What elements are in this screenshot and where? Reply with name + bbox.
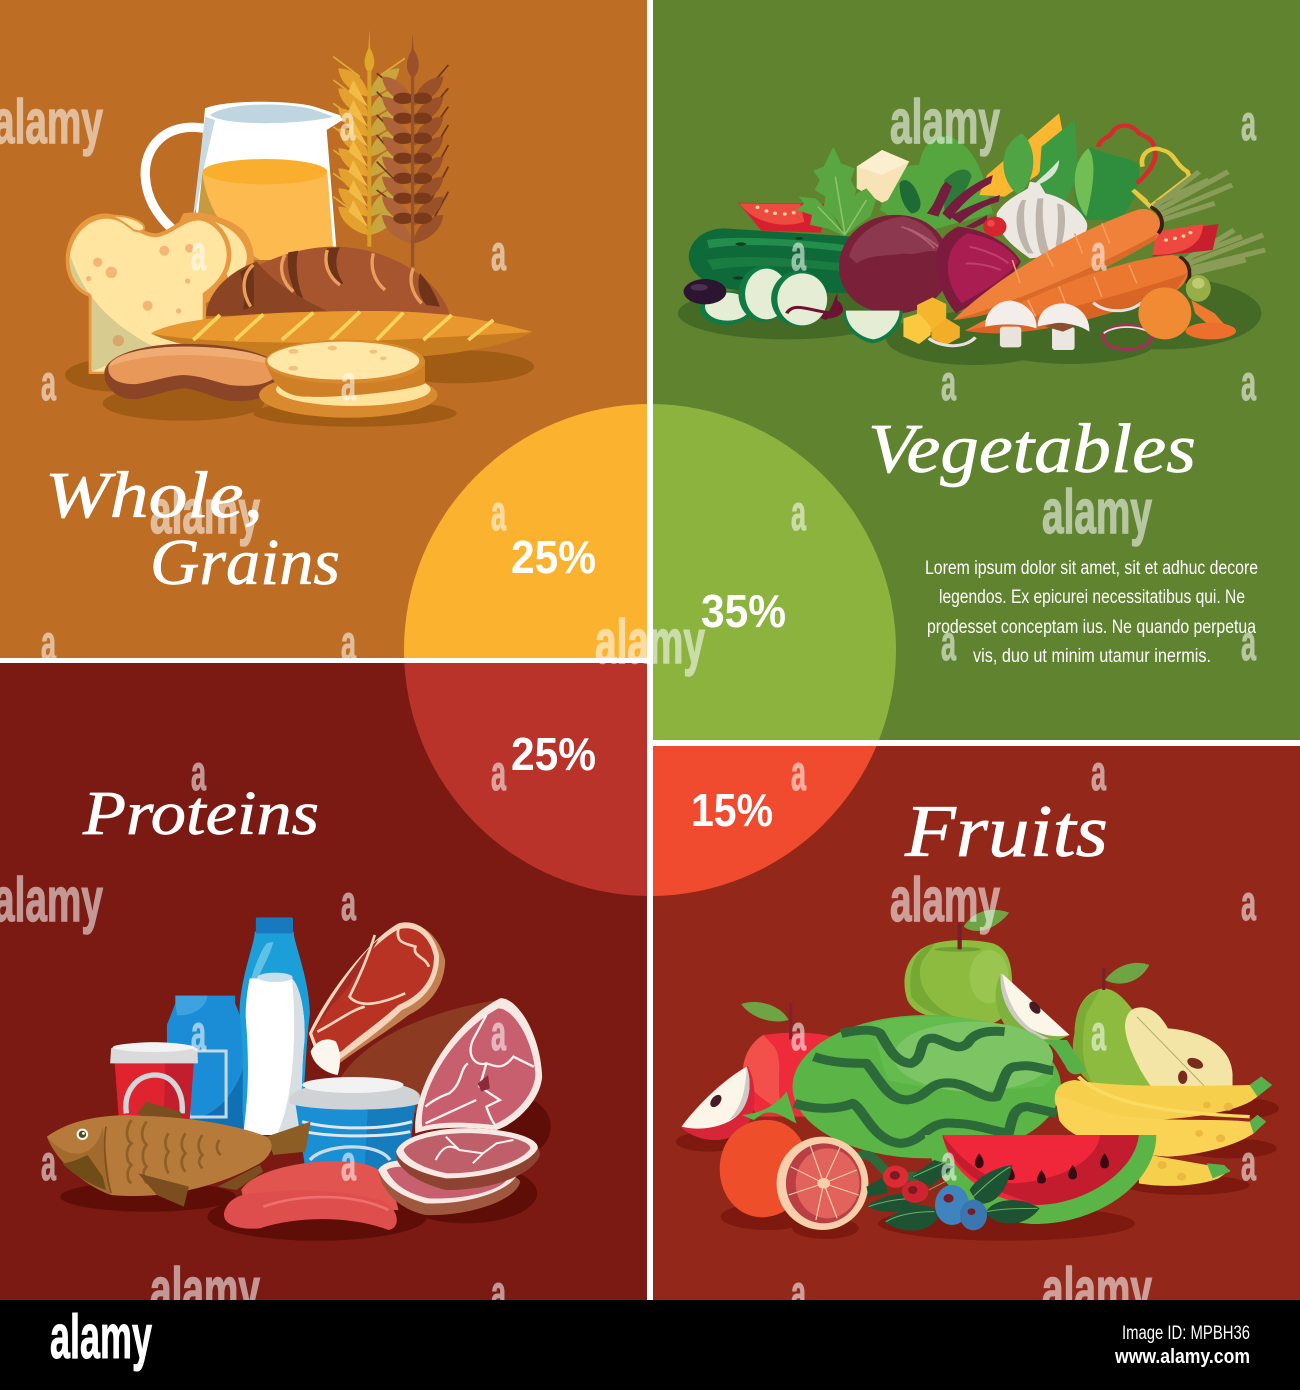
icon: brown wheat	[377, 33, 448, 267]
icon: orange and carrot slices	[1138, 275, 1236, 339]
watermarks: alamy overlay: alamy	[1042, 478, 1152, 547]
icon: brown loaf	[206, 247, 449, 316]
panel: vegetables background	[653, 0, 1300, 740]
pie segment: proteins 25%	[404, 663, 647, 896]
pie segment: whole grains 25%	[404, 404, 647, 658]
icon: green apple	[904, 910, 1012, 1024]
icon: cheese cubes	[903, 297, 960, 345]
icon: ham back	[341, 998, 517, 1113]
watermarks: alamy overlay: a	[791, 745, 807, 801]
icon: yogurt tub	[290, 1077, 420, 1170]
text block: lorem ipsum description: vis, duo ut minim utamur inermis.	[973, 646, 1211, 667]
icon: orange	[720, 1120, 808, 1217]
watermarks: alamy overlay: a	[341, 615, 357, 671]
watermarks: alamy overlay: a	[41, 615, 57, 671]
icon: watermelon slice	[925, 1135, 1156, 1224]
icon: cured ham slices	[378, 998, 542, 1215]
watermarks: alamy overlay: a	[1091, 745, 1107, 801]
icon: grapefruit half	[777, 1137, 868, 1230]
icon: beet	[787, 175, 1021, 320]
icon: sausages	[224, 1161, 398, 1230]
icon: tomato slice right	[1152, 224, 1219, 257]
icon: stacked bread slices	[259, 340, 438, 418]
icon: tomato slice left	[738, 203, 828, 233]
icon: cucumber	[689, 228, 853, 293]
icon: steak	[309, 922, 445, 1075]
icon: baguette	[151, 311, 532, 359]
watermarks: alamy overlay: a	[491, 1265, 507, 1321]
watermarks: alamy overlay: a	[1091, 1005, 1107, 1061]
panel: fruits background	[653, 746, 1300, 1300]
icon: green pear	[1073, 963, 1154, 1088]
footer: image id: Image ID: MPBH36	[1122, 1323, 1250, 1344]
icon: red cup	[110, 1042, 198, 1130]
watermarks: alamy overlay: a	[491, 745, 507, 801]
watermarks: alamy overlay: a	[491, 485, 507, 541]
icon: milk carton	[167, 996, 244, 1135]
watermarks: alamy overlay: a	[1241, 615, 1257, 671]
watermarks: alamy overlay: a	[341, 355, 357, 411]
watermarks: alamy overlay: a	[1241, 875, 1257, 931]
label: 35% vegetables: 35%	[701, 585, 786, 637]
footer: website: www.alamy.com	[1114, 1346, 1250, 1368]
icon: milk bottle	[240, 917, 310, 1135]
icon: fish	[47, 1102, 311, 1207]
panel: whole grains background	[0, 0, 647, 658]
illustration: bread, juice and wheat	[65, 29, 534, 427]
label: 25% whole grains: 25%	[511, 531, 596, 583]
watermarks: alamy overlay: a	[41, 1135, 57, 1191]
footer logo: alamy: alamy	[50, 1303, 152, 1372]
watermarks: alamy overlay: a	[191, 225, 207, 281]
watermarks: alamy overlay: a	[41, 355, 57, 411]
watermarks: alamy overlay: a	[491, 225, 507, 281]
watermarks: alamy overlay: a	[791, 1005, 807, 1061]
icon: cucumber slices	[684, 266, 903, 343]
title: Whole, Grains: Whole,	[45, 459, 263, 532]
icon: toast slice	[104, 344, 282, 401]
watermarks: alamy overlay: alamy	[150, 1256, 260, 1325]
icon: golden wheat	[333, 29, 405, 247]
icon: berries and leaves	[866, 1160, 1040, 1231]
watermarks: alamy overlay: a	[491, 1005, 507, 1061]
watermarks: alamy overlay: a	[1241, 95, 1257, 151]
icon: apple slice green	[996, 974, 1070, 1048]
label: 25% proteins: 25%	[511, 728, 596, 780]
watermarks: alamy overlay: alamy	[890, 866, 1000, 935]
icon: carrot stems	[1154, 172, 1265, 273]
watermarks: alamy overlay: a	[791, 1265, 807, 1321]
watermarks: alamy overlay: a	[340, 95, 356, 151]
icon: mushrooms	[985, 301, 1089, 350]
label: 15% fruits: 15%	[691, 784, 773, 836]
title: Proteins: Proteins	[82, 780, 319, 848]
watermarks: alamy overlay: alamy	[595, 608, 705, 677]
illustration: proteins	[47, 917, 551, 1241]
icon: carrots	[953, 207, 1190, 333]
icon: half pear	[1125, 1007, 1233, 1088]
footer bar	[0, 1300, 1300, 1390]
watermarks: alamy overlay: a	[1241, 355, 1257, 411]
watermarks: alamy overlay: a	[341, 875, 357, 931]
icon: cheese block	[857, 150, 909, 203]
watermarks: alamy overlay: a	[191, 1005, 207, 1061]
illustration: vegetables	[678, 113, 1265, 365]
icon: greens	[880, 113, 1139, 233]
title: Whole, Grains	[45, 459, 340, 599]
watermarks: alamy overlay: a	[1241, 1135, 1257, 1191]
watermarks: alamy overlay: a	[941, 355, 957, 411]
watermarks: alamy overlay: a	[941, 615, 957, 671]
icon: juice jug	[145, 102, 347, 260]
watermarks: alamy overlay: a	[341, 1135, 357, 1191]
icon: sliced bread loaf	[66, 212, 254, 374]
title: Whole, Grains: Grains	[150, 526, 340, 599]
watermarks: alamy overlay: a	[791, 225, 807, 281]
icon: leafy herb	[796, 147, 876, 237]
icon: garlic	[997, 160, 1087, 258]
illustration: fruits	[676, 910, 1279, 1241]
watermarks: alamy overlay: a	[191, 745, 207, 801]
text block: lorem ipsum description	[925, 558, 1258, 667]
icon: onion rings	[929, 303, 1151, 349]
panel: proteins background	[0, 663, 647, 1300]
icon: red apple	[741, 1002, 831, 1117]
icon: watermelon	[793, 1015, 1061, 1177]
watermarks: alamy overlay: a	[1091, 225, 1107, 281]
icon: bananas	[1043, 1040, 1272, 1186]
watermarks: alamy overlay: alamy	[1042, 1256, 1152, 1325]
icon: pepper rings	[1098, 126, 1189, 207]
title: Vegetables: Vegetables	[868, 411, 1196, 488]
pie segment: fruits 15%	[653, 746, 876, 896]
pie segment: vegetables 35%	[653, 404, 896, 740]
watermarks: alamy overlay: alamy	[150, 478, 260, 547]
title: Fruits: Fruits	[904, 791, 1108, 873]
watermarks: alamy overlay: a	[791, 485, 807, 541]
icon: apple slice red	[681, 1066, 796, 1140]
watermarks: alamy overlay: a	[941, 1135, 957, 1191]
watermarks: alamy overlay: alamy	[890, 88, 1000, 157]
